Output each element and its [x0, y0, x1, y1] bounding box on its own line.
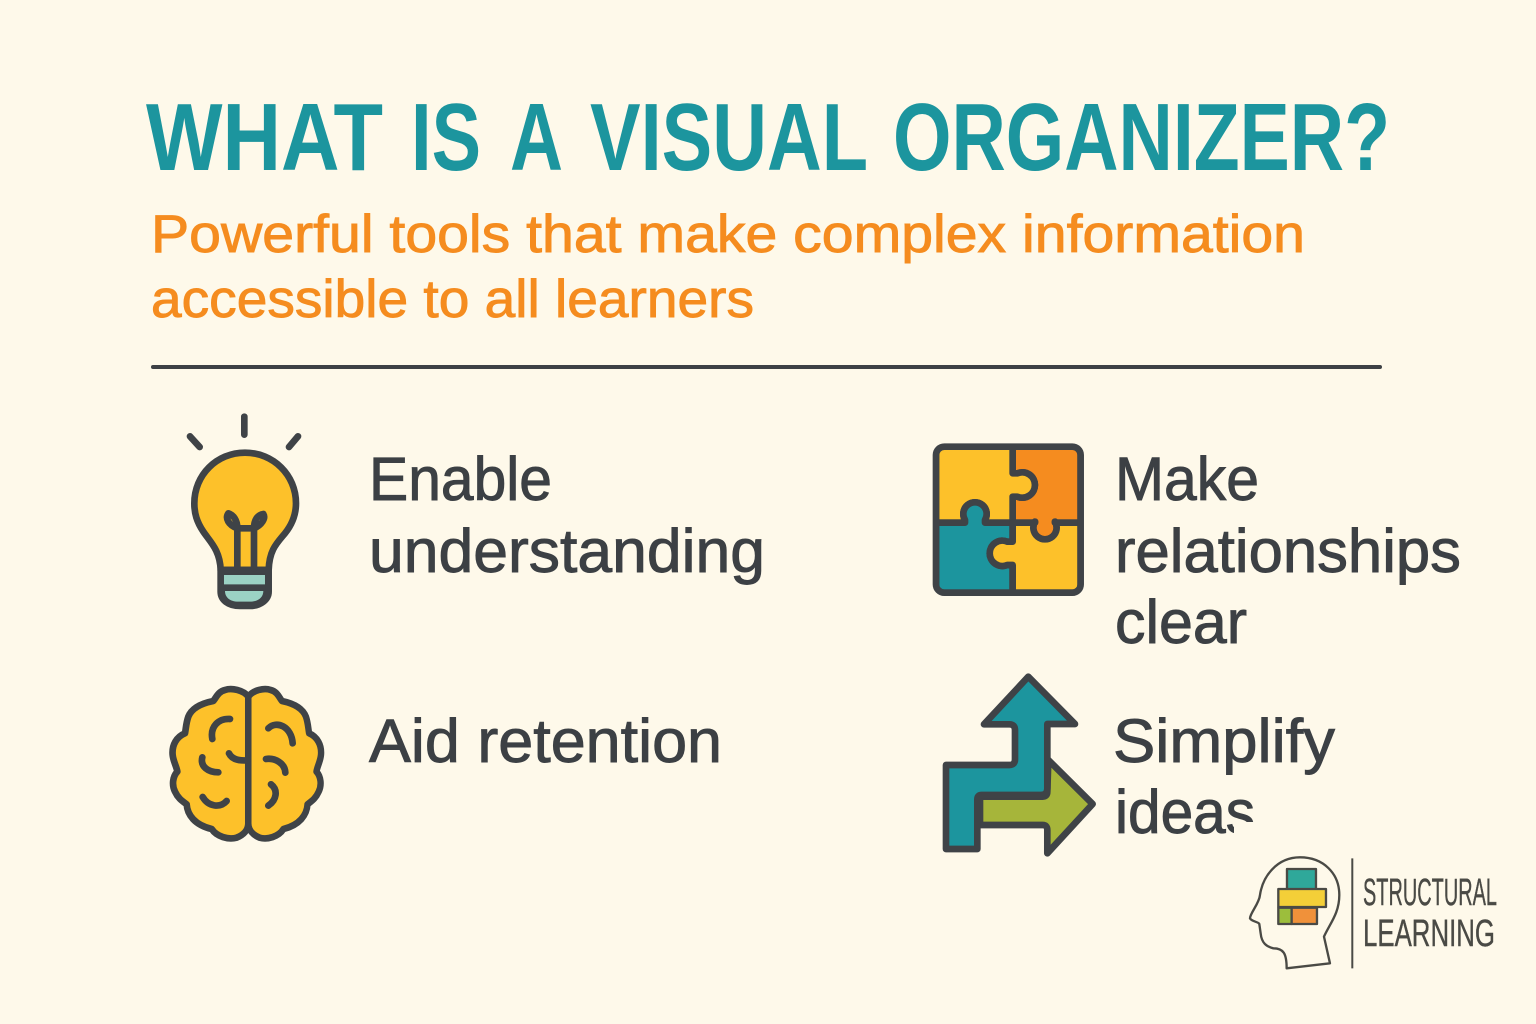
subtitle: Powerful tools that make complex information [151, 205, 1305, 264]
label: make relationships clear [1115, 445, 1461, 656]
logo wordmark [1363, 872, 1497, 955]
title: A [510, 84, 563, 191]
icon: arrows [946, 677, 1093, 853]
logo: structural learning [1250, 857, 1497, 968]
label: enable understanding [369, 445, 765, 585]
icon: light bulb [190, 417, 298, 606]
label: make relationships clear: clear [1115, 588, 1247, 656]
title: ORGANIZER? [893, 84, 1390, 191]
label: simplify ideas [1113, 707, 1336, 846]
title [146, 84, 1390, 191]
title: IS [411, 84, 481, 191]
label: simplify ideas: ideas [1115, 778, 1255, 846]
label: enable understanding: understanding [369, 517, 765, 585]
subtitle [151, 205, 1305, 329]
label: simplify ideas: Simplify [1113, 707, 1336, 775]
logo head icon [1250, 857, 1352, 968]
title: VISUAL [590, 84, 868, 191]
label: make relationships clear: relationships [1115, 517, 1461, 585]
icon: brain [173, 689, 321, 838]
label: aid retention: Aid retention [369, 707, 722, 775]
subtitle: accessible to all learners [151, 270, 754, 329]
title: WHAT [146, 84, 383, 191]
label: make relationships clear: Make [1115, 445, 1259, 513]
icon: puzzle [936, 447, 1081, 593]
label: enable understanding: Enable [369, 445, 552, 513]
